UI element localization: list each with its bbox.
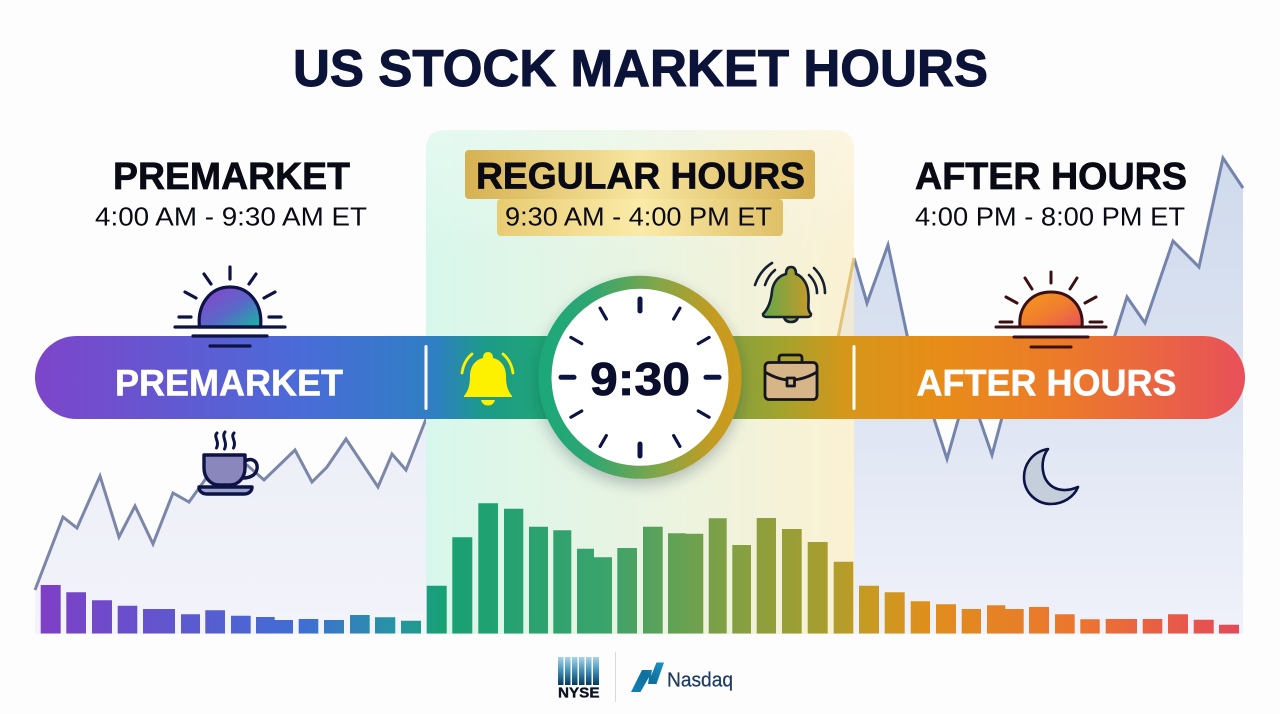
icon: sunrise bbox=[175, 267, 285, 346]
heading: regular hours: REGULAR HOURS bbox=[476, 156, 805, 196]
timeline label: premarket: PREMARKET bbox=[115, 362, 343, 404]
icon: sunset bbox=[996, 272, 1106, 347]
icon: green ringing bell bbox=[755, 263, 825, 322]
icon: yellow bell bbox=[462, 352, 513, 406]
logo: NYSE bbox=[558, 657, 600, 702]
clock bbox=[538, 276, 742, 479]
heading: after hours: AFTER HOURS bbox=[915, 156, 1187, 198]
clock tick marks bbox=[561, 299, 719, 456]
chart: after hours price area bbox=[854, 158, 1243, 634]
chart: premarket price area bbox=[35, 419, 426, 634]
heading: after hours: 4:00 PM - 8:00 PM ET bbox=[915, 204, 1185, 232]
icon: moon bbox=[1024, 449, 1078, 504]
logo: Nasdaq: Nasdaq bbox=[667, 670, 733, 692]
clock time: 9:30 bbox=[590, 353, 690, 405]
bars: regular hours volume bbox=[427, 503, 853, 634]
logo: NYSE: NYSE bbox=[558, 686, 600, 702]
heading: regular hours: 9:30 AM - 4:00 PM ET bbox=[505, 204, 772, 232]
icon: briefcase bbox=[765, 355, 817, 400]
bars: after hours volume bbox=[859, 586, 1239, 634]
panel: regular hours bbox=[426, 130, 854, 634]
title: US STOCK MARKET HOURS bbox=[293, 40, 988, 98]
timeline label: after hours: AFTER HOURS bbox=[916, 362, 1176, 404]
heading: after hours bbox=[915, 156, 1187, 232]
heading: premarket: 4:00 AM - 9:30 AM ET bbox=[95, 204, 367, 232]
logo: Nasdaq bbox=[631, 662, 733, 692]
heading: premarket: PREMARKET bbox=[113, 156, 350, 198]
timeline bar bbox=[35, 336, 1245, 419]
heading: regular hours bbox=[465, 150, 815, 236]
icon: coffee cup bbox=[199, 432, 257, 494]
bars: premarket volume bbox=[41, 585, 421, 634]
heading: premarket bbox=[95, 156, 367, 232]
